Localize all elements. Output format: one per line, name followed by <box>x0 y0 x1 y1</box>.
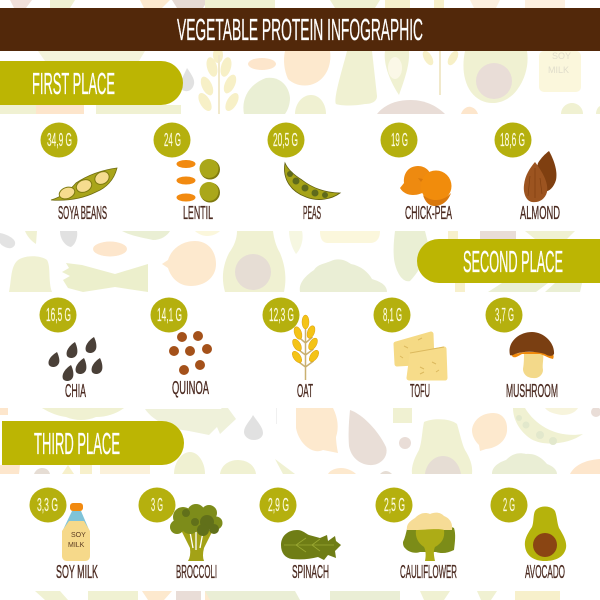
item: peas: 20,5 G <box>273 129 298 150</box>
item: lentil: 24 G <box>164 129 181 150</box>
item: quinoa: 14,1 G <box>157 304 182 325</box>
heading: second place <box>417 239 600 283</box>
item: chick-pea: 19 G <box>391 129 408 150</box>
white band: first place row <box>0 114 600 231</box>
item: chick-pea <box>380 122 452 223</box>
item: cauliflower <box>376 488 457 582</box>
heading: first place <box>0 61 183 105</box>
text: SOY MILK <box>56 562 98 582</box>
item: tofu <box>374 298 445 401</box>
text: CAULIFLOWER <box>400 562 457 582</box>
item: soy milk: SOY <box>71 532 86 539</box>
text: CHICK-PEA <box>405 203 452 223</box>
item: almond: 18,6 G <box>500 129 525 150</box>
item: soy milk: MILK <box>68 542 85 549</box>
item: tofu: 8,1 G <box>383 304 402 325</box>
item: lentil: LENTIL <box>183 203 213 223</box>
item: avocado <box>490 488 566 582</box>
item: avocado: 2 G <box>503 494 515 515</box>
header bar with title <box>0 8 600 51</box>
item: soya beans: 34,9 G <box>47 129 72 150</box>
item: oat: 12,3 G <box>269 304 294 325</box>
item: broccoli: 3 G <box>151 494 163 515</box>
item: almond <box>494 122 560 223</box>
heading: first place: FIRST PLACE <box>32 66 115 101</box>
item: broccoli <box>138 488 222 582</box>
item: peas: PEAS <box>303 203 321 223</box>
item: mushroom: 3,7 G <box>495 304 514 325</box>
white band: second place row <box>0 292 600 408</box>
item: tofu: TOFU <box>410 381 430 401</box>
item: soya beans: SOYA BEANS <box>58 203 107 223</box>
faded vegetable background pattern: SOY <box>552 51 571 61</box>
item: almond: ALMOND <box>520 203 560 223</box>
heading: third place: THIRD PLACE <box>34 426 120 461</box>
heading: third place <box>2 421 184 465</box>
item: cauliflower: 2,5 G <box>384 494 405 515</box>
white band: third place row <box>0 474 600 591</box>
item: lentil <box>154 122 220 223</box>
item: spinach: 2,9 G <box>268 494 289 515</box>
faded vegetable background pattern: MILK <box>548 65 569 75</box>
item: mushroom <box>486 298 558 401</box>
item: quinoa: QUINOA <box>172 378 209 398</box>
item: oat <box>262 298 321 401</box>
item: spinach: SPINACH <box>292 562 329 582</box>
text: BROCCOLI <box>176 562 217 582</box>
item: soy milk: 3,3 G <box>37 494 58 515</box>
item: spinach <box>260 488 341 582</box>
item: chia: 16,5 G <box>46 304 71 325</box>
item: soya beans <box>40 122 117 223</box>
item: peas <box>268 122 340 223</box>
item: oat: OAT <box>297 381 313 401</box>
item: soy milk <box>30 488 98 582</box>
item: chia <box>40 298 102 401</box>
item: chia: CHIA <box>65 381 86 401</box>
item: quinoa <box>150 298 212 398</box>
